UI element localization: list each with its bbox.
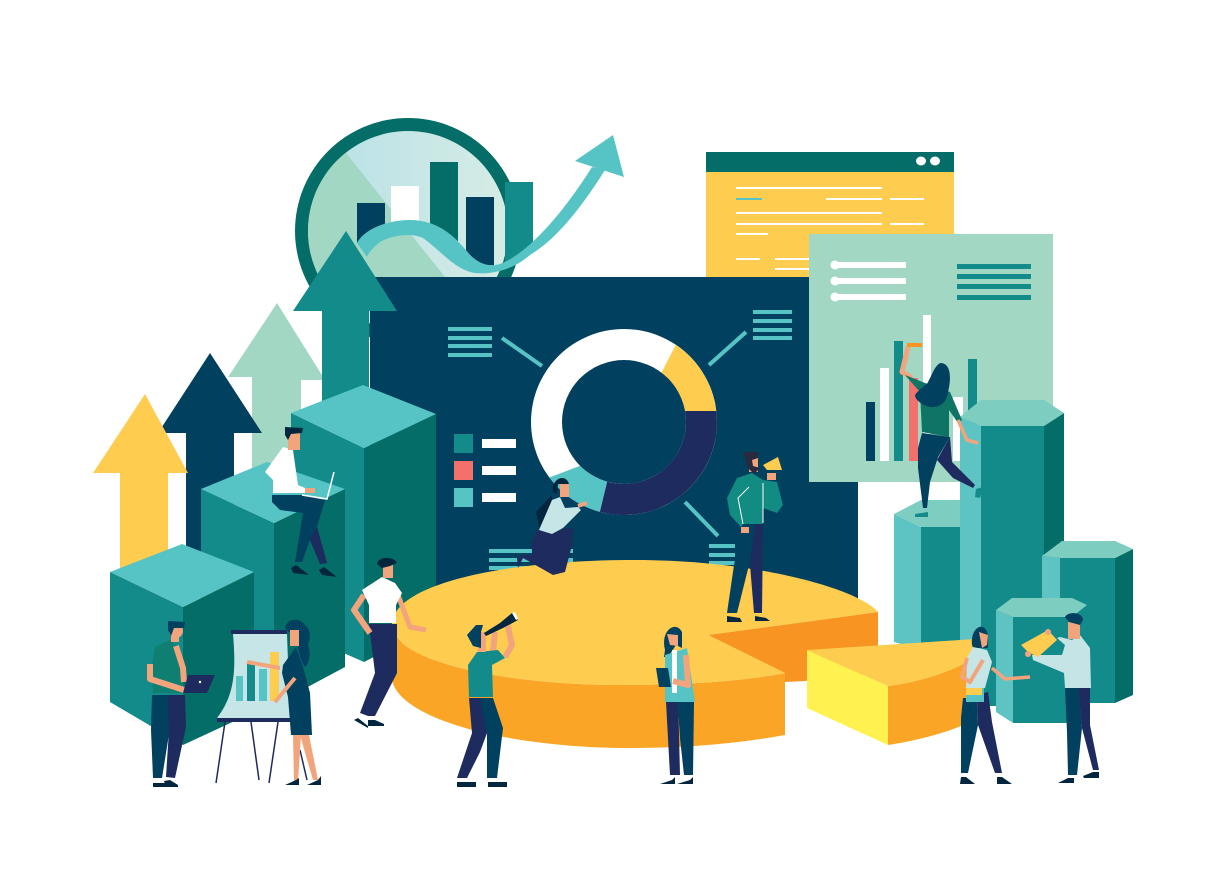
rising trend arrow — [357, 135, 624, 273]
cube block: tall — [291, 385, 436, 662]
person: presenting woman — [247, 620, 321, 785]
person: seated with laptop — [265, 427, 337, 577]
cube block: front — [110, 544, 254, 745]
person: man holding document — [1021, 613, 1099, 783]
growth arrow: mint — [228, 303, 325, 480]
browser window panel — [706, 152, 954, 282]
growth arrow: navy — [158, 353, 262, 570]
person: kneeling woman — [517, 478, 587, 575]
growth arrow: teal — [293, 231, 397, 420]
person: man with telescope — [457, 612, 518, 787]
donut chart — [531, 329, 717, 515]
pie chart — [392, 560, 878, 748]
hexagon column: tall — [960, 400, 1064, 706]
person: man with megaphone — [727, 452, 783, 622]
illustration: business analytics scene — [93, 118, 1133, 787]
pie slice — [807, 639, 975, 745]
dashboard panel — [370, 277, 858, 607]
person: man with laptop — [150, 621, 215, 787]
growth arrow: yellow — [93, 394, 188, 580]
person: woman climbing with pencil — [902, 343, 983, 517]
person: woman with bag — [960, 627, 1030, 784]
magnifier circle with bar chart — [290, 118, 533, 344]
hexagon column: small — [996, 598, 1087, 723]
mint chart panel — [809, 234, 1053, 482]
hexagon column: left — [894, 500, 975, 650]
legend — [454, 434, 516, 507]
text lines — [448, 310, 792, 570]
cube block: middle — [201, 462, 345, 705]
hexagon column: right — [1042, 541, 1133, 703]
flip chart board — [216, 630, 307, 783]
person: white tee walking — [354, 558, 426, 728]
connector lines — [502, 332, 746, 536]
person: woman with tablet — [656, 627, 695, 784]
